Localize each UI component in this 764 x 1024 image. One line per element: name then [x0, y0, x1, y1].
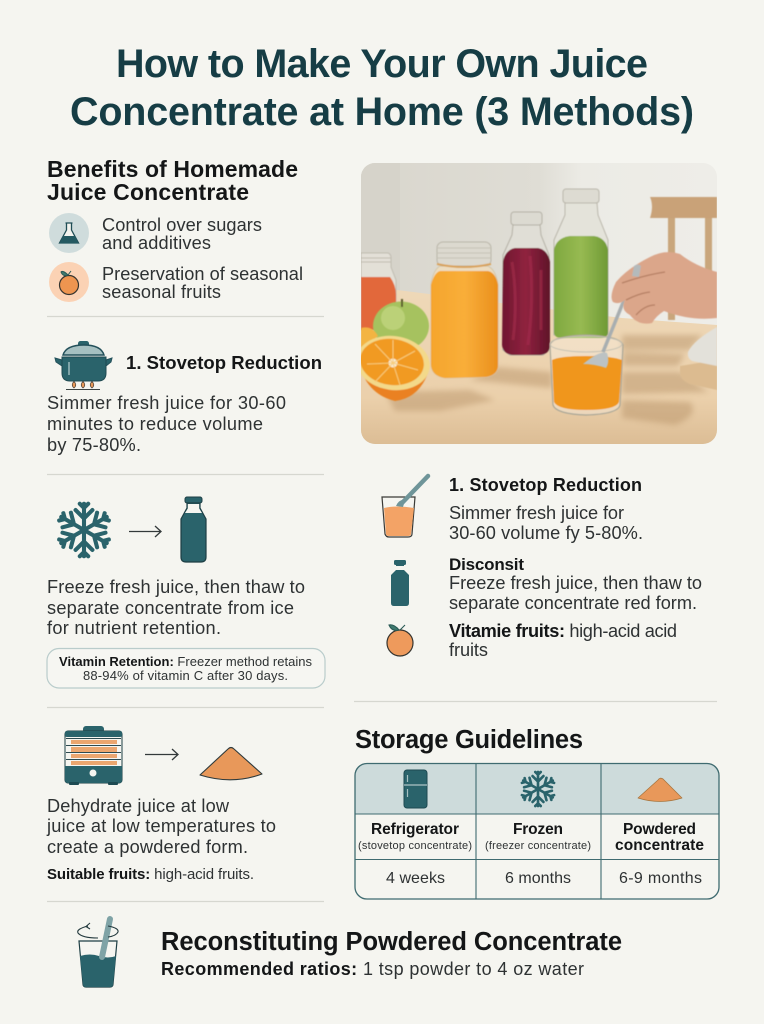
column: powdered: 6-9 months: [619, 870, 702, 887]
icon: small peach: [387, 625, 413, 656]
column: powdered: Powdered: [623, 821, 696, 838]
icon: small bottle: [391, 560, 409, 606]
panel: dehydrator method: [46, 726, 276, 883]
text: control over sugars: Control over sugars: [102, 215, 262, 235]
text: preservation: Preservation of seasonal: [102, 264, 303, 284]
column: refrigerator: (stovetop concentrate): [358, 840, 472, 852]
text: disconsit: separate concentrate red form.: [449, 593, 697, 613]
icon: stirring glass: [78, 919, 118, 987]
text: freezer description: [47, 577, 305, 638]
text: recommended ratios: Recommended ratios: 1 tsp powder to 4 oz water: [161, 959, 584, 979]
callout: vitamin retention: 88-94% of vitamin C after 30 days.: [83, 668, 288, 683]
heading: reconstituting: Reconstituting Powdered Concentrate: [161, 928, 622, 956]
orange jar: [431, 242, 498, 378]
panel: reconstituting: [78, 919, 622, 987]
heading: benefits: [47, 156, 298, 205]
icon: refrigerator: [404, 770, 427, 808]
text: vitamie fruits: Vitamie fruits: high-acid acid: [449, 621, 677, 641]
icon: dehydrator: [65, 726, 122, 785]
icon: bottle: [181, 497, 206, 562]
text: preservation: [102, 264, 303, 302]
column: frozen: Frozen: [513, 821, 563, 838]
icon: powder: [638, 778, 682, 802]
text: control over sugars: and additives: [102, 233, 211, 253]
callout: vitamin retention: Vitamin Retention: Freezer method retains: [59, 654, 312, 669]
title: How to Make Your Own Juice: [116, 42, 648, 86]
text: stovetop description: [47, 393, 286, 455]
napkin and board: [680, 327, 717, 390]
text: vitamie fruits: [449, 621, 677, 660]
icon: pot: [55, 341, 112, 390]
icon: peach: [49, 262, 89, 302]
text: dehydrator description: Dehydrate juice at low: [47, 796, 230, 816]
panel: benefits: [47, 156, 303, 302]
column: refrigerator: Refrigerator: [371, 821, 459, 838]
text: vitamie fruits: fruits: [449, 640, 488, 660]
red jar left: [361, 253, 396, 330]
text: stovetop description: by 75-80%.: [47, 435, 141, 455]
panel: method summary: [382, 475, 702, 660]
text: simmer: Simmer fresh juice for: [449, 503, 624, 523]
half orange: [361, 326, 430, 402]
hand: [612, 252, 717, 324]
table: storage guidelines: [355, 764, 719, 899]
icon: snowflake: [521, 772, 555, 806]
text: simmer: [449, 503, 643, 543]
icon: flask: [49, 213, 89, 253]
heading: benefits: Benefits of Homemade: [47, 156, 298, 182]
title: [70, 42, 694, 134]
table: [361, 290, 717, 444]
column: frozen: 6 months: [505, 870, 571, 887]
photo: juice jars on a table: [353, 163, 717, 444]
text: dehydrator description: [46, 796, 276, 857]
text: stovetop description: Simmer fresh juice for 30-60: [47, 393, 286, 413]
chair: [650, 197, 717, 320]
icon: powder pile: [200, 748, 262, 780]
text: disconsit: [449, 555, 702, 613]
panel: freezer method: [47, 497, 325, 688]
text: freezer description: for nutrient retention.: [47, 618, 221, 638]
text: dehydrator description: juice at low temperatures to: [46, 816, 276, 836]
column: refrigerator: 4 weeks: [386, 870, 445, 887]
heading: stovetop: 1. Stovetop Reduction: [126, 352, 322, 373]
text: freezer description: separate concentrate from ice: [47, 598, 294, 618]
text: preservation: seasonal fruits: [102, 282, 221, 302]
text: dehydrator description: create a powdered form.: [47, 837, 248, 857]
heading: benefits: Juice Concentrate: [47, 179, 249, 205]
column: powdered: concentrate: [615, 837, 704, 854]
red bottle: [502, 212, 550, 355]
text: disconsit: Freeze fresh juice, then thaw to: [449, 573, 702, 593]
green bottle: [554, 189, 608, 338]
shadows: [385, 335, 708, 425]
icon: glass with spoon: [382, 476, 428, 537]
text: disconsit: Disconsit: [449, 555, 524, 574]
text: stovetop description: minutes to reduce volume: [47, 414, 263, 434]
column: powdered: [615, 821, 704, 887]
column: refrigerator: [358, 821, 472, 887]
spoon: [582, 300, 625, 368]
column: frozen: [485, 821, 591, 887]
text: freezer description: Freeze fresh juice, then thaw to: [47, 577, 305, 597]
glass of concentrate: [550, 335, 623, 415]
heading: storage guidelines: Storage Guidelines: [355, 726, 583, 754]
text: simmer: 30-60 volume fy 5-80%.: [449, 523, 643, 543]
arrow: dehydrate to powder: [145, 749, 178, 760]
icon: snowflake: [57, 504, 111, 556]
text: control over sugars: [102, 215, 262, 253]
panel: stovetop method: [47, 341, 322, 455]
apple: [373, 299, 429, 350]
text: suitable fruits: Suitable fruits: high-acid fruits.: [47, 866, 254, 883]
column: frozen: (freezer concentrate): [485, 840, 591, 852]
heading: stovetop reduction: 1. Stovetop Reduction: [449, 475, 642, 495]
arrow: freeze to bottle: [129, 526, 161, 537]
title: Concentrate at Home (3 Methods): [70, 90, 694, 134]
callout: vitamin retention: [47, 648, 325, 688]
